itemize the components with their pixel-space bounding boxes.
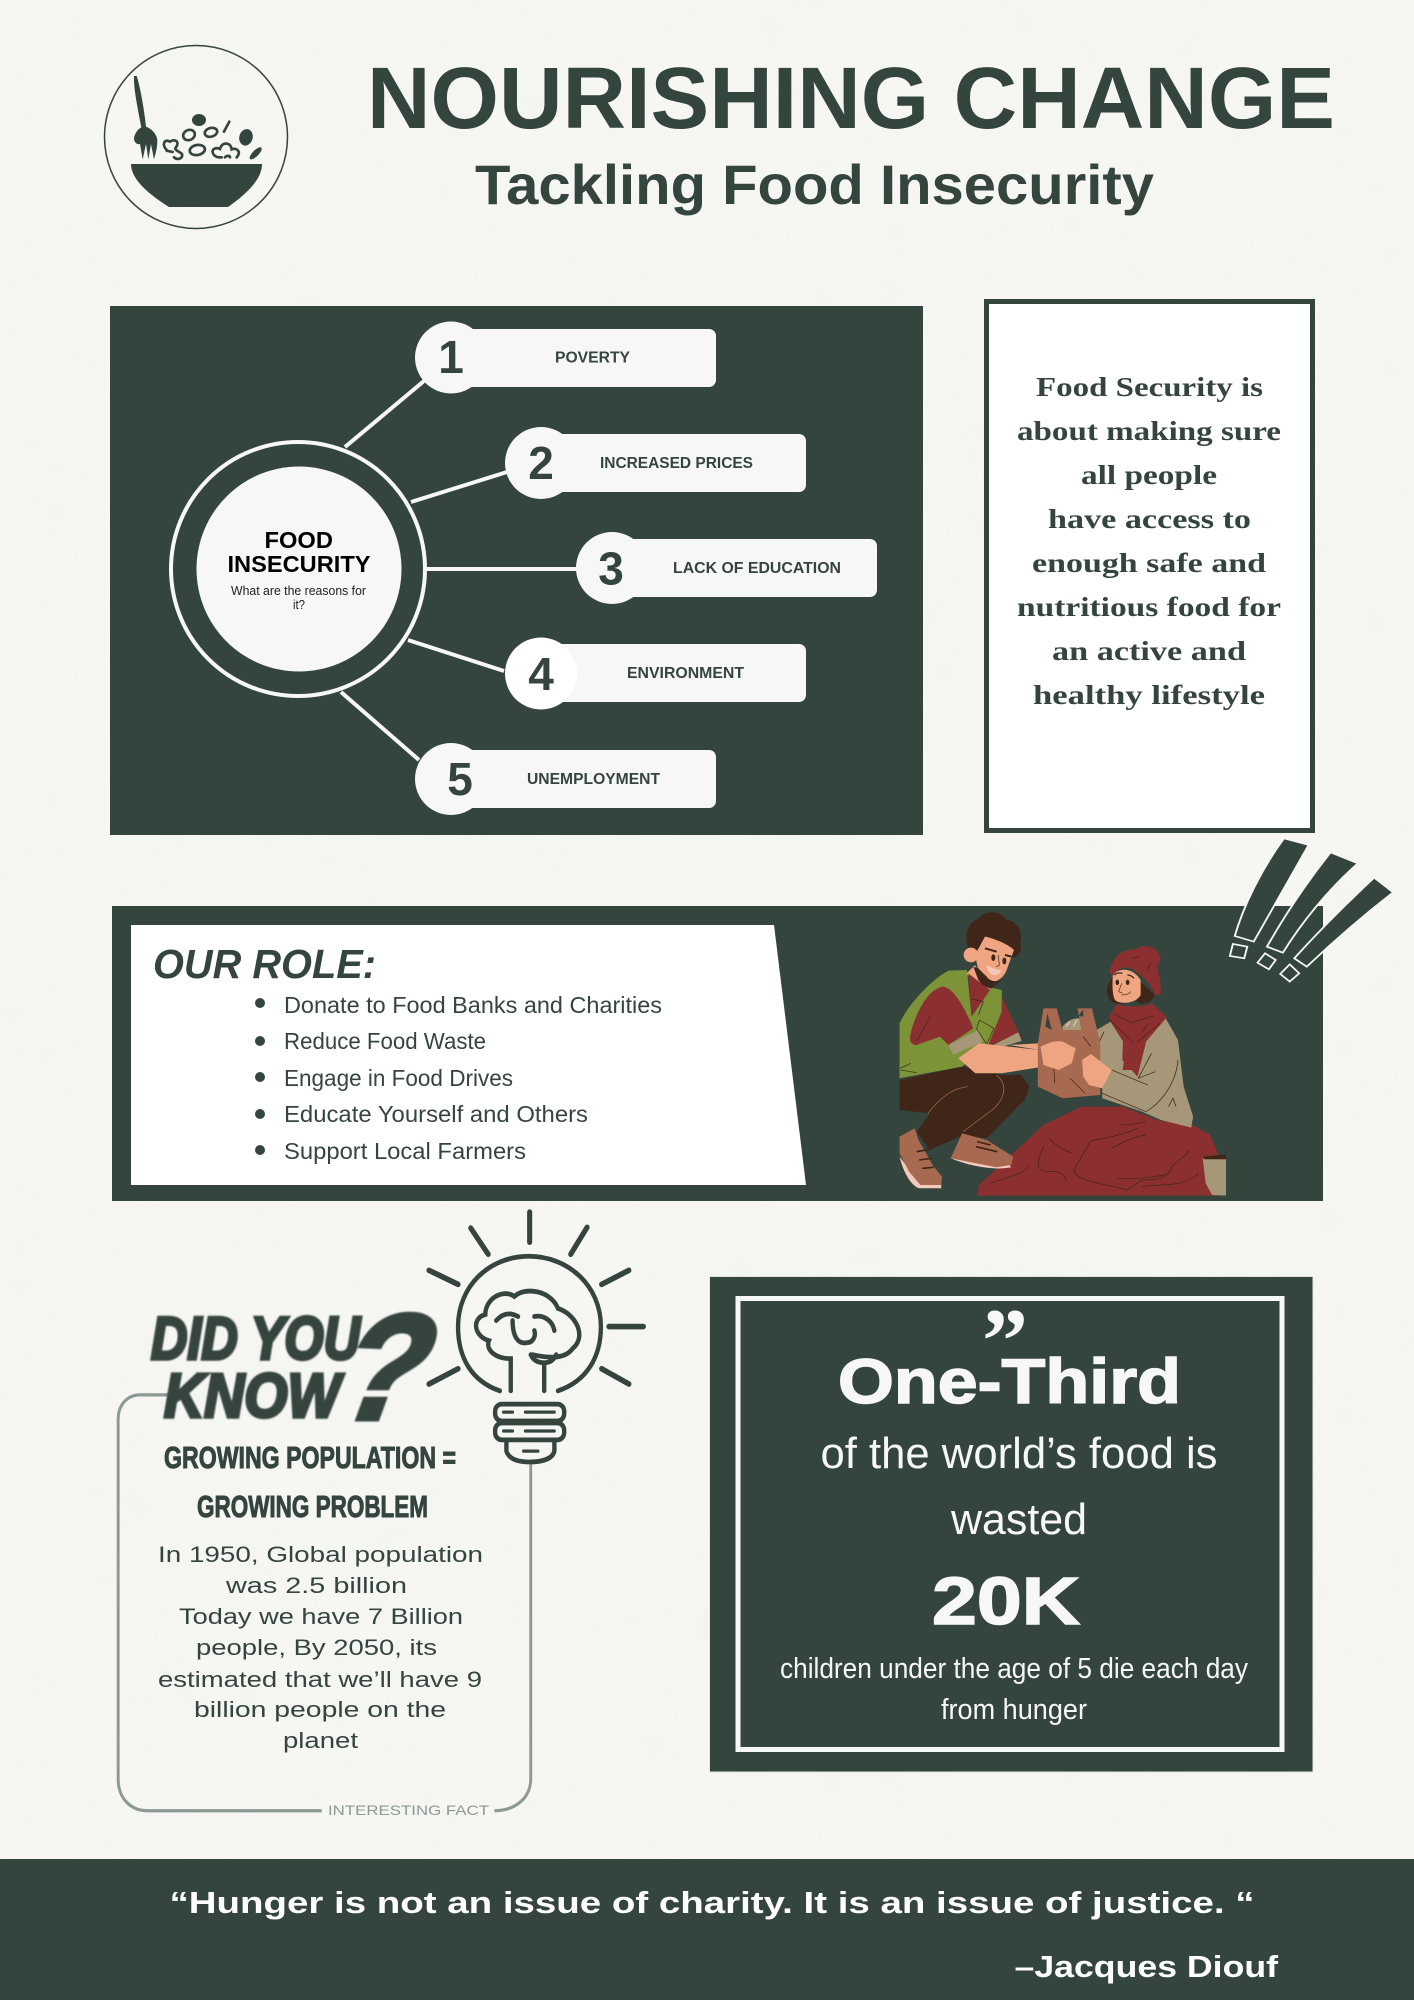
central circle: food insecurity: INSECURITY: [228, 551, 370, 577]
icon: food bowl logo: [104, 46, 288, 228]
cause 5: unemployment: UNEMPLOYMENT: [527, 771, 660, 788]
text block: population facts: billion people on the: [194, 1697, 446, 1722]
panel: food security definition: an active and: [1052, 636, 1246, 666]
stat: 20K: 20K: [932, 1564, 1080, 1639]
text: children hunger: children under the age of 5 die each day: [780, 1653, 1248, 1685]
cause 2: increased prices: INCREASED PRICES: [600, 455, 753, 472]
text: children hunger: from hunger: [941, 1694, 1087, 1726]
text: children hunger: [780, 1653, 1248, 1726]
text block: population facts: estimated that we’ll have 9: [158, 1667, 482, 1692]
frame: interesting fact: [118, 1395, 531, 1818]
stat: one-third: One-Third: [838, 1347, 1181, 1417]
panel: food security definition: [986, 302, 1312, 830]
cause 3: lack of education: [576, 532, 877, 604]
subtitle: Tackling Food Insecurity: [475, 153, 1154, 216]
central circle: food insecurity: [196, 466, 402, 672]
panel: food security definition: all people: [1081, 460, 1217, 490]
text: food wasted: wasted: [950, 1495, 1087, 1544]
cause 2: increased prices: [505, 427, 806, 499]
list: actions: Support Local Farmers: [284, 1138, 526, 1164]
text: food wasted: of the world’s food is: [820, 1429, 1218, 1478]
text block: population facts: was 2.5 billion: [225, 1573, 407, 1598]
list: actions: Donate to Food Banks and Charities: [284, 992, 662, 1018]
text block: population facts: planet: [283, 1728, 358, 1753]
cause 4: environment: [505, 638, 806, 710]
panel: food security definition: have access to: [1048, 504, 1251, 534]
central circle: food insecurity: FOOD: [264, 527, 333, 553]
footer: quote: “Hunger is not an issue of charity. It is an issue of justice. “: [170, 1885, 1254, 1920]
food bag: [1038, 1008, 1112, 1098]
cause 1: poverty: [415, 322, 716, 394]
panel: food security definition: enough safe and: [1032, 548, 1266, 578]
icon: quotation mark: ”: [982, 1290, 1028, 1392]
list: actions: Engage in Food Drives: [284, 1065, 513, 1091]
man: [900, 912, 1047, 1188]
list: actions: Reduce Food Waste: [284, 1028, 486, 1054]
cause 1: poverty: POVERTY: [555, 350, 630, 366]
panel: food security definition: about making sure: [1017, 416, 1281, 446]
central circle: food insecurity: it?: [293, 597, 305, 612]
footer: quote: –Jacques Diouf: [1014, 1949, 1279, 1984]
heading: did you know: ?: [316, 1283, 462, 1451]
list: actions: Educate Yourself and Others: [284, 1101, 588, 1127]
cause 5: unemployment: 5: [447, 753, 473, 805]
text block: population facts: Today we have 7 Billion: [179, 1604, 463, 1629]
footer: quote: [0, 1859, 1414, 2000]
woman: [1097, 946, 1193, 1128]
panel: food security definition: nutritious food for: [1017, 592, 1281, 622]
cause 1: poverty: 1: [438, 331, 464, 383]
panel: food security definition: Food Security is: [1036, 372, 1263, 402]
heading: growing population: [164, 1440, 456, 1524]
central circle: food insecurity: What are the reasons for: [231, 583, 367, 598]
heading: growing population: GROWING PROBLEM: [197, 1489, 428, 1524]
heading: did you know: [151, 1283, 462, 1451]
frame: interesting fact: INTERESTING FACT: [328, 1802, 490, 1818]
text block: population facts: [158, 1542, 483, 1753]
icon: three exclamation marks: [1230, 838, 1393, 982]
cause 2: increased prices: 2: [528, 437, 554, 489]
cause 4: environment: 4: [528, 648, 554, 700]
cause 4: environment: ENVIRONMENT: [627, 665, 744, 682]
text block: population facts: people, By 2050, its: [196, 1635, 437, 1660]
panel: food insecurity causes: [110, 306, 923, 835]
icon: light bulb with brain: [429, 1212, 643, 1462]
panel: did you know: [118, 1212, 643, 1818]
blanket and cup: [977, 1107, 1226, 1196]
heading: did you know: KNOW: [164, 1362, 344, 1431]
panel: food waste and hunger statistics: [710, 1276, 1313, 1772]
list: actions: [255, 992, 662, 1164]
cause 3: lack of education: LACK OF EDUCATION: [673, 560, 841, 577]
illustration: volunteer handing food bag to person in need: [900, 912, 1226, 1196]
panel: food security definition: healthy lifestyle: [1033, 680, 1265, 710]
cause 5: unemployment: [415, 743, 716, 815]
cause 3: lack of education: 3: [598, 542, 624, 594]
title: NOURISHING CHANGE: [367, 50, 1335, 147]
heading: our role: OUR ROLE:: [153, 941, 376, 987]
text: food wasted: [820, 1429, 1218, 1544]
panel: our role banner: [112, 906, 1323, 1201]
heading: did you know: DID YOU: [151, 1305, 361, 1372]
text block: population facts: In 1950, Global population: [158, 1542, 483, 1567]
heading: growing population: GROWING POPULATION =: [164, 1440, 456, 1475]
